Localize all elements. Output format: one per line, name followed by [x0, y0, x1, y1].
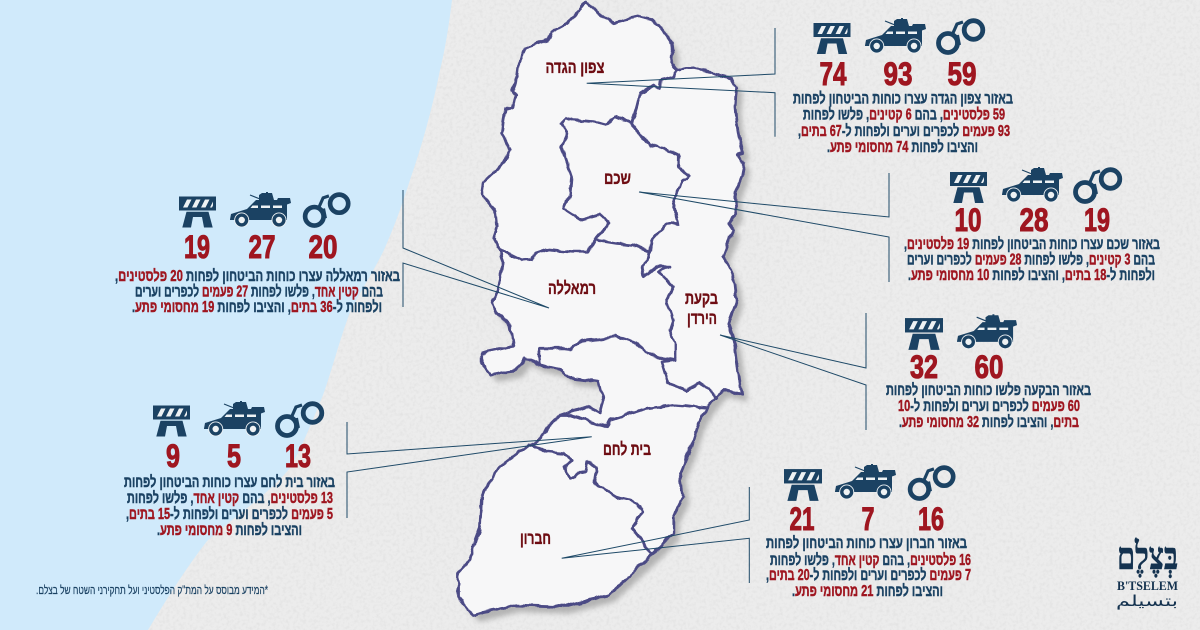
number: raids: 93 — [884, 56, 912, 92]
panel: Hebron stats — [766, 464, 971, 600]
icon: handcuffs — [910, 468, 953, 499]
text block: 16 פלסטינים, בהם קטין אחד, פלשו לפחות — [770, 551, 971, 569]
icon: armored vehicle — [230, 192, 291, 228]
panel: Jordan Valley stats — [886, 314, 1091, 431]
text block: באזור רמאללה עצרו כוחות הביטחון לפחות 20 פלסטינים, — [115, 267, 400, 285]
panel: Nablus stats — [904, 167, 1160, 284]
text block — [124, 473, 335, 539]
region label: north West Bank: צפון הגדה — [546, 57, 604, 77]
text block: באזור חברון עצרו כוחות הביטחון לפחות — [766, 534, 967, 552]
text block: 13 פלסטינים, בהם קטין אחד, פלשו לפחות — [127, 489, 333, 507]
number: checkpoints: 21 — [790, 501, 814, 537]
icon: barrier — [950, 172, 987, 203]
icon: barrier — [784, 469, 822, 501]
text block — [766, 534, 971, 600]
text block: 59 פלסטינים, בהם 6 קטינים, פלשו לפחות — [803, 106, 1005, 124]
number: raids: 7 — [862, 501, 874, 537]
text block: 60 פעמים לכפרים וערים ולפחות ל-10 — [898, 397, 1080, 415]
number: raids: 28 — [1020, 202, 1048, 238]
number: arrests: 20 — [308, 229, 338, 265]
text block: בהם קטין אחד, פלשו לפחות 27 פעמים לכפרים וערים — [135, 282, 383, 300]
region label: Jordan Valley: בקעת — [685, 288, 718, 308]
text block: באזור צפון הגדה עצרו כוחות הביטחון לפחות — [793, 90, 1013, 108]
icon: handcuffs — [938, 21, 983, 52]
map regions outline — [458, 3, 744, 615]
text block: בתים, והציבו לפחות 32 מחסומי פתע. — [899, 413, 1079, 431]
map shadow — [464, 10, 750, 622]
icon: barrier — [814, 23, 850, 54]
text block: בהם 3 קטינים, פלשו לפחות 28 פעמים לכפרים וערים — [907, 250, 1155, 268]
icon: barrier — [153, 406, 190, 436]
text block: 93 פעמים לכפרים וערים ולפחות ל-67 בתים, — [798, 122, 1010, 140]
logo Arabic wordmark: بتسيلم — [1116, 592, 1178, 610]
number: arrests: 13 — [285, 438, 311, 474]
footnote: *המידע מבוסס על המת"ק הפלסטיני ועל תחקירני השטח של בצלם. — [36, 583, 268, 597]
number: arrests: 59 — [948, 56, 976, 92]
region label: Jordan Valley — [685, 288, 718, 328]
text block: באזור בית לחם עצרו כוחות הביטחון לפחות — [124, 473, 335, 491]
number: raids: 5 — [227, 438, 241, 474]
text block: והציבו לפחות 9 מחסומי פתע. — [157, 521, 302, 539]
panel: north West Bank stats — [793, 18, 1013, 156]
region label: Hebron: חברון — [520, 528, 551, 548]
number: arrests: 19 — [1084, 202, 1110, 238]
panel: Ramallah stats — [115, 192, 400, 316]
icon: armored vehicle — [835, 464, 896, 500]
connector lines — [347, 28, 889, 583]
text block: 5 פעמים לכפרים וערים ולפחות ל-15 בתים, — [126, 505, 333, 523]
region label: Bethlehem: בית לחם — [603, 439, 651, 459]
number: checkpoints: 10 — [954, 202, 982, 238]
text block — [793, 90, 1013, 156]
text block — [115, 267, 400, 316]
text block: והציבו לפחות 21 מחסומי פתע. — [792, 582, 943, 600]
number: arrests: 16 — [918, 501, 944, 537]
icon: handcuffs — [305, 195, 348, 226]
text block — [904, 235, 1160, 284]
logo: B'Tselem — [1116, 536, 1178, 610]
text block: ולפחות ל-18 בתים, והציבו לפחות 10 מחסומי פתע. — [908, 266, 1155, 284]
text block: והציבו לפחות 74 מחסומי פתע. — [827, 138, 978, 156]
icon: armored vehicle — [204, 401, 265, 436]
region label: Jordan Valley: הירדן — [687, 308, 717, 328]
number: checkpoints: 74 — [820, 56, 846, 92]
sea — [0, 0, 452, 630]
text block: 7 פעמים לכפרים וערים ולפחות ל-20 בתים, — [766, 566, 971, 584]
icon: armored vehicle — [865, 18, 926, 54]
text block — [886, 381, 1091, 431]
map: West Bank regions — [458, 3, 750, 622]
logo Latin wordmark: B'TSELEM — [1117, 578, 1178, 593]
text block: ולפחות ל-36 בתים, והציבו לפחות 19 מחסומי פתע. — [132, 298, 382, 316]
icon: handcuffs — [278, 404, 322, 436]
icon: handcuffs — [1076, 170, 1120, 202]
icon: barrier — [179, 196, 216, 228]
region label: Nablus: שכם — [604, 168, 631, 188]
icon: armored vehicle — [957, 314, 1017, 349]
number: checkpoints: 19 — [184, 229, 210, 265]
panel: Bethlehem stats — [124, 401, 335, 539]
icon: barrier — [905, 318, 943, 350]
logo Hebrew wordmark: בְּצֶלֶם — [1117, 536, 1178, 578]
number: raids: 60 — [974, 349, 1004, 385]
icon: armored vehicle — [1002, 167, 1063, 202]
text block: באזור הבקעה פלשו כוחות הביטחון לפחות — [886, 381, 1091, 399]
number: checkpoints: 32 — [910, 349, 938, 385]
region label: Ramallah: רמאללה — [548, 278, 596, 298]
number: raids: 27 — [248, 229, 276, 265]
number: checkpoints: 9 — [166, 438, 180, 474]
